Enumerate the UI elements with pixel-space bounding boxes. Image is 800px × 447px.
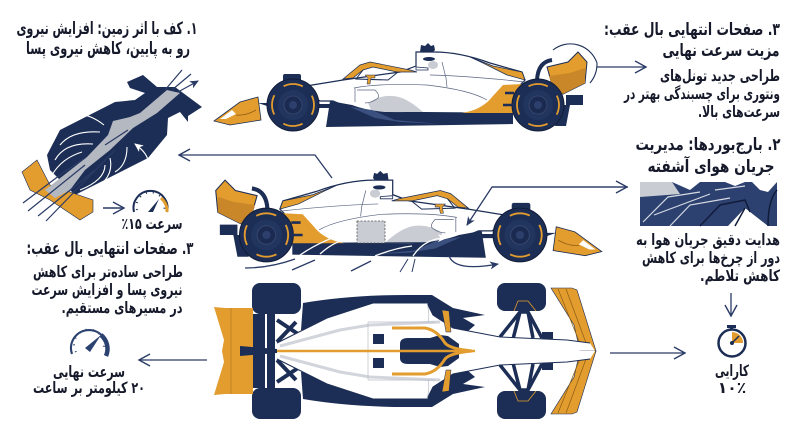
text: low drag description (32, 263, 183, 317)
heading: low drag rear wing: ۳. صفحات انتهایی بال عقب: (26, 239, 194, 259)
arrow tick to heading (492, 186, 627, 188)
icon: stopwatch (718, 325, 746, 356)
text: low drag description: طراحی ساده‌تر برای کاهش (33, 263, 183, 281)
title: ground effect floor heading: ۱. کف با اثر زمین: افزایش نیروی (16, 19, 197, 39)
arrow to top speed (139, 359, 207, 361)
arrow to bargeboards (467, 187, 628, 225)
arrow from mid car to floor (179, 155, 332, 178)
title: ground effect floor heading: رو به پایین، کاهش نیروی پسا (26, 39, 190, 59)
text: bargeboard description (636, 231, 781, 285)
efficiency label (715, 362, 750, 397)
text: low drag description: نیروی پسا و افزایش سرعت (32, 281, 182, 300)
diagram: car floor with airflow (22, 70, 202, 221)
arrow to efficiency (610, 352, 685, 354)
middle side car with airflow (216, 171, 602, 272)
efficiency label: ۱۰٪ (718, 379, 746, 397)
speed label: سرعت ۱۵٪ (122, 215, 182, 233)
heading: rear wing top speed (604, 20, 780, 61)
efficiency label: کارایی (715, 362, 750, 380)
heading: bargeboards (636, 135, 781, 177)
top speed label: ۲۰ کیلومتر بر ساعت (33, 379, 145, 397)
rear wing highlight arc (553, 44, 597, 83)
title: ground effect floor heading (16, 19, 197, 59)
text: rear wing description (623, 67, 780, 121)
image: bargeboard detail (640, 182, 777, 226)
arrow to stopwatch (730, 293, 732, 316)
arrow to speed gauge (103, 207, 124, 209)
icon: top speed gauge (71, 330, 107, 356)
top speed label: سرعت نهایی (53, 363, 125, 381)
arrow to heading (597, 66, 646, 68)
tested area (357, 221, 385, 243)
top speed label (33, 363, 145, 397)
text: low drag description: در مسیرهای مستقیم. (62, 299, 183, 317)
top view car (214, 283, 596, 419)
icon: speed gauge (134, 191, 168, 212)
side car top (214, 43, 587, 131)
